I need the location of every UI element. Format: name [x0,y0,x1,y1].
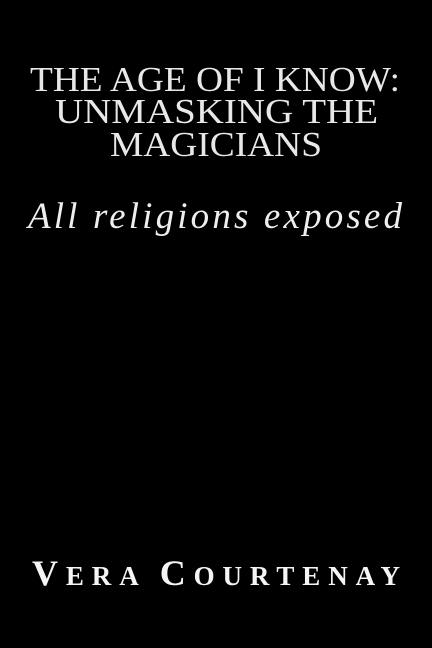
title: THE AGE OF I KNOW: [30,61,400,99]
title: UNMASKING THE [55,93,378,131]
author name: V ERA C OURTENAY [32,553,400,593]
subtitle: All religions exposed [25,196,402,237]
title: MAGICIANS [110,126,322,164]
title [30,61,400,164]
